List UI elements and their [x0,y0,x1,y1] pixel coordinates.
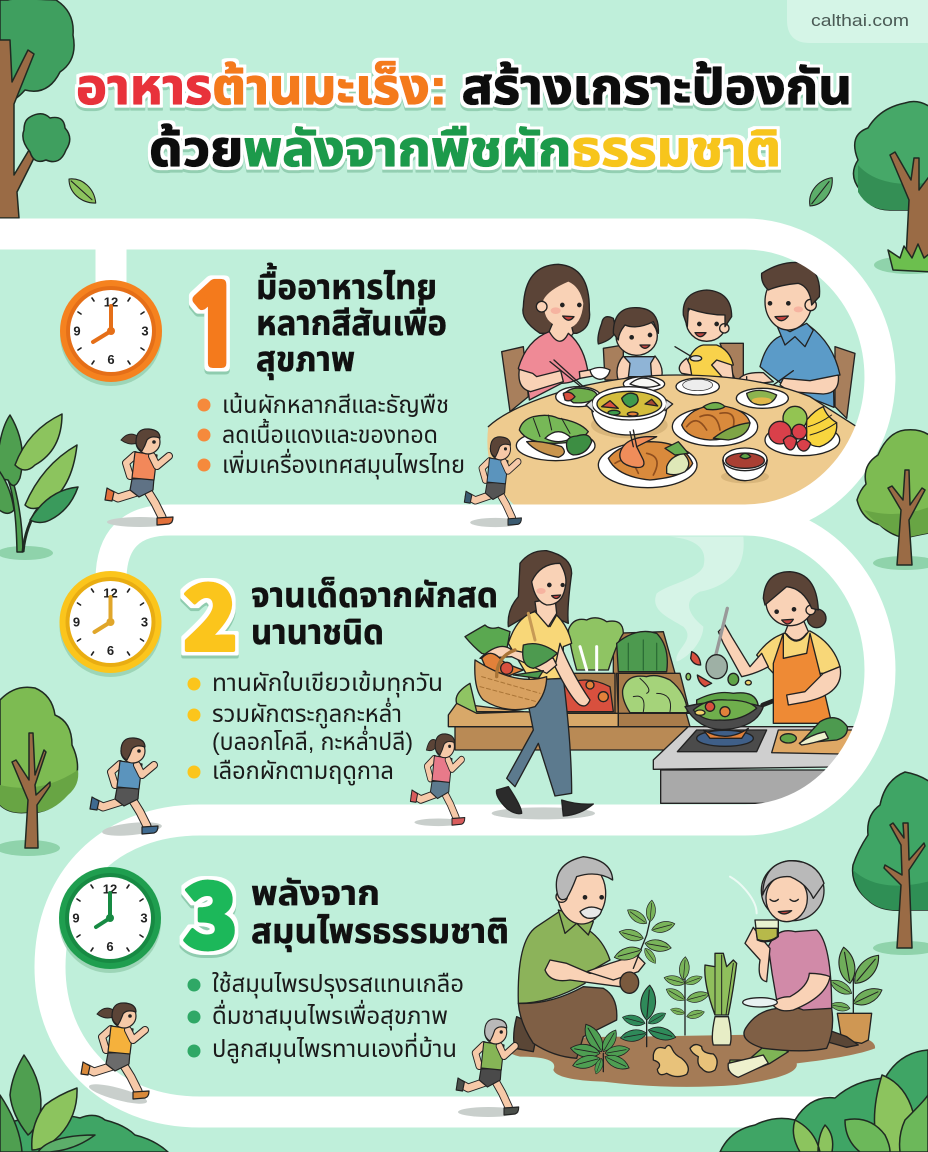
tree: right lower [853,772,928,955]
runner: boy in blue on table edge [464,437,521,527]
scene: family meal at table [487,262,857,517]
bullets 1: เพิ่มเครื่องเทศสมุนไพรไทย [222,448,465,480]
soil [507,1033,875,1087]
clock 1 [60,280,162,386]
road: connector to first clock [96,240,126,300]
bullets 2: รวมผักตระกูลกะหล่ำ [212,697,402,729]
plate: mother [556,387,601,407]
scene: kitchen counter and cook [448,537,860,803]
clock 2: 6 [107,643,114,658]
bullets 2 [188,670,443,786]
clock 3: 12 [103,882,117,896]
heading 3: พลังจาก [251,874,380,913]
clock 1: 3 [141,324,149,338]
curry bowl [586,387,673,438]
leaf: top right [804,173,838,211]
clock 2: 9 [73,614,80,630]
ginger root left [653,1045,688,1077]
table top [487,375,857,517]
clock 1: 12 [104,294,118,310]
watermark: calthai.com [787,0,928,43]
plate: rice left [623,377,665,391]
woman with basket [475,551,595,819]
father [738,262,840,407]
title [76,59,852,177]
clock 2: 3 [141,614,148,630]
tree: right upper middle [857,430,928,570]
number 2: 2 [183,546,238,676]
cook [706,572,841,723]
herb: dark basil [619,984,677,1047]
heading 1 [256,262,447,380]
heading 3 [251,874,509,952]
section 2 text [183,546,498,786]
tossed vegetables [686,652,751,687]
tree: top left [0,0,74,218]
clock 3: 3 [140,910,148,926]
clock 1: 9 [73,324,81,338]
bullets 3 [188,971,464,1064]
heading 2: นานาชนิด [251,613,384,652]
bullets 1: เน้นผักหลากสีและธัญพืช [222,392,449,419]
vegetable stall [448,618,690,750]
bullets 3: ใช้สมุนไพรปรุงรสแทนเกลือ [212,971,464,999]
plate: father [736,388,788,408]
section 3 text [183,844,509,1064]
herb: centre seedling [663,956,710,1035]
potted plant [827,946,885,1043]
clock 2 [60,571,162,677]
bullets 1: ลดเนื้อแดงและของทอด [222,418,438,449]
ginger root right [690,1045,717,1072]
bullets 3: ดื่มชาสมุนไพรเพื่อสุขภาพ [212,999,448,1031]
herb: tall plant in hands [613,900,676,968]
sauce bowl [721,448,769,483]
heading 1: หลากสีสันเพื่อ [256,298,447,343]
heading 2: จานเด็ดจากผักสด [251,576,498,615]
leaf: top left [64,173,101,209]
heading 1: มื้ออาหารไทย [256,262,437,307]
runner: girl in pink [410,734,465,826]
counter and stove [653,727,860,803]
heading 3: สมุนไพรธรรมชาติ [251,912,509,952]
chairs [502,343,855,418]
mother [518,264,610,400]
road: main path [0,234,880,1112]
herb: lemongrass [705,953,737,1045]
salad plate [516,415,595,461]
bullets 2: ทานผักใบเขียวเข้มทุกวัน [212,670,443,698]
heading 1: สุขภาพ [256,340,355,380]
herb: foreground leaves [569,1021,632,1075]
scene: grandparents with herbs [507,857,885,1087]
runner: girl in yellow [81,1003,149,1108]
clock 3: 6 [106,939,114,954]
number 3: 3 [183,844,238,974]
bullets 2: เลือกผักตามฤดูกาล [212,758,394,786]
fruit plate [765,406,840,456]
title line 2: ด้วยพลังจากพืชผัก ธรรมชาติ [149,121,781,177]
clock 3: 9 [72,910,80,926]
clock 1: 6 [107,352,115,367]
lemongrass bundle [728,1038,788,1077]
tree: top right [853,102,928,274]
runner: boy in blue left [90,738,162,838]
section 1 text [182,262,465,480]
wok with vegetables [684,692,773,730]
bullets 3: ปลูกสมุนไพรทานเองที่บ้าน [212,1032,457,1064]
plant: left middle [0,414,78,560]
title line 1: อาหารต้านมะเร็ง: สร้างเกราะป้องกัน [76,59,852,115]
clock 2: 12 [103,586,118,600]
grandfather [514,857,645,1058]
clock 3 [59,867,161,973]
bullets 2: (บลอกโคลี, กะหล่ำปลี) [212,725,413,756]
shrimp plate [598,430,697,488]
runner: girl in orange [105,429,173,527]
bullets 1 [198,392,465,480]
heading 2 [251,576,498,652]
boy [675,290,733,379]
noodle plate [672,402,758,446]
tree: left middle [0,687,78,856]
runner: grandfather in green [456,1019,519,1117]
grandmother [730,861,858,1051]
bush: bottom left [0,1055,168,1152]
bush: bottom right [720,1050,928,1152]
steam [655,537,744,662]
bok choy on board [780,718,847,745]
number 1: 1 [182,274,247,381]
watermark: calthai.com: calthai.com [811,11,909,30]
plate: rice right [676,378,719,395]
girl [598,308,662,381]
